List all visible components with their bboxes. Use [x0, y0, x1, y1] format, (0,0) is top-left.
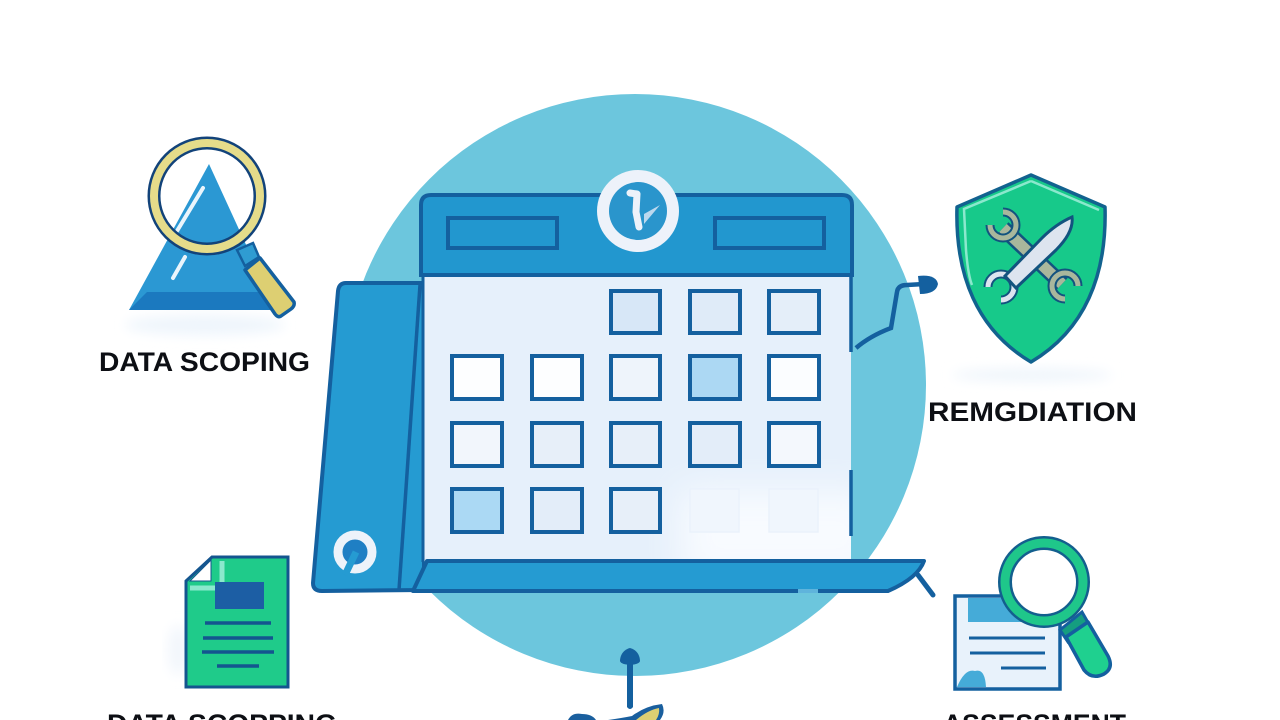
step: remediation: [928, 175, 1137, 427]
calendar back cover: [313, 283, 424, 591]
arrow: calendar to remediation: [856, 276, 938, 348]
label: REMGDIATION: [928, 397, 1137, 427]
calendar page: [423, 274, 851, 562]
calendar: [313, 170, 933, 595]
label: DATA SCOPING: [99, 347, 310, 377]
icon: document with green magnifying glass: [955, 543, 1110, 689]
icon: green document: [168, 557, 288, 687]
calendar base: [413, 561, 924, 591]
background circle: [344, 94, 926, 676]
step: data scoping (bottom left): [107, 557, 337, 720]
step: data scoping (top left): [99, 143, 310, 377]
calendar header: [421, 170, 852, 275]
icon: shield with wrenches: [952, 175, 1112, 381]
clock icon: [597, 170, 679, 252]
arrow: calendar to bottom step: [620, 648, 640, 709]
icon: pyramid with magnifying glass: [125, 143, 294, 335]
step: assessment: [943, 543, 1126, 720]
step: bottom icon (cropped): [568, 704, 664, 720]
date grid: [452, 291, 819, 532]
binder ring: [338, 535, 372, 575]
